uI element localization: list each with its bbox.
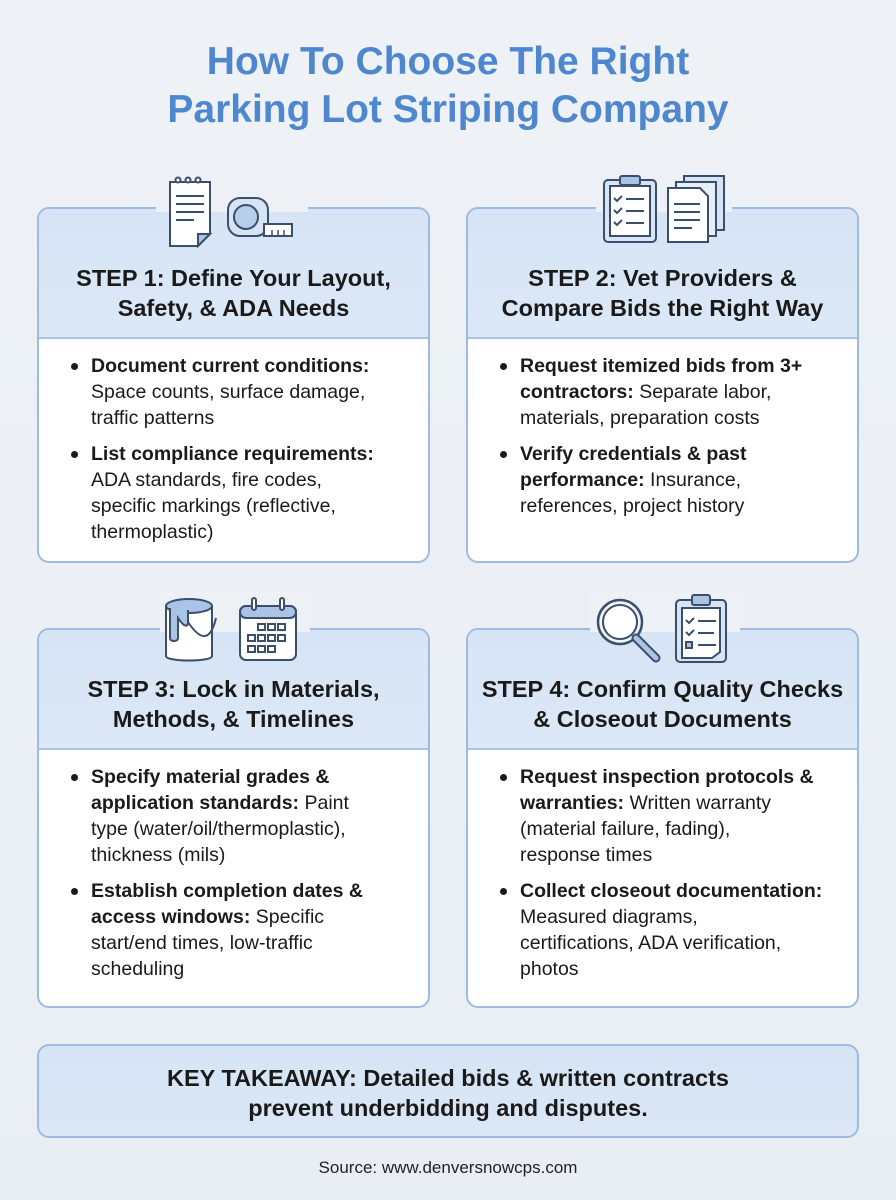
step 1 bullets [71, 355, 374, 543]
step 4 heading: & Closeout Documents [533, 706, 792, 732]
title [167, 40, 729, 131]
step 4 bullets [500, 766, 822, 980]
step 4 bullets: Measured diagrams, [520, 906, 698, 928]
callout: key takeaway [37, 1044, 859, 1138]
step 3 bullets: thickness (mils) [91, 844, 225, 866]
step 2 bullets: Verify credentials & past performance: Insurance, references, project history [520, 443, 747, 517]
callout: key takeaway: prevent underbidding and disputes. [248, 1095, 648, 1121]
step 4 bullets: response times [520, 844, 652, 866]
step 3 bullets: Specify material grades & [91, 766, 329, 788]
step 3 bullets: Establish completion dates & [91, 880, 363, 902]
panel: step 1 [37, 207, 430, 563]
step 4 bullets: Request inspection protocols & [520, 766, 814, 788]
step 2 heading [468, 209, 857, 339]
step 4 heading [468, 630, 857, 750]
title: Parking Lot Striping Company [167, 88, 729, 131]
panel: step 4 [466, 628, 859, 1008]
step 3 heading: Methods, & Timelines [113, 706, 354, 732]
step 3 bullets [71, 766, 363, 980]
step 2 bullets [500, 355, 802, 517]
step 1 bullets: Document current conditions: Space counts, surface damage, traffic patterns [91, 355, 369, 429]
step 3 bullets: start/end times, low-traffic [91, 932, 313, 954]
step 4 bullets: Collect closeout documentation: [520, 880, 822, 902]
panel: step 3 [37, 628, 430, 1008]
icons: paint bucket and calendar [160, 597, 310, 662]
step 2 heading: Compare Bids the Right Way [502, 295, 823, 321]
step 3 bullets: type (water/oil/thermoplastic), [91, 818, 346, 840]
step 3 heading [39, 630, 428, 750]
step 2 heading: STEP 2: Vet Providers & [528, 265, 797, 291]
step 4 heading: STEP 4: Confirm Quality Checks [482, 676, 843, 702]
icons: magnifier and checklist [590, 594, 740, 663]
step 4 bullets: warranties: Written warranty [520, 792, 771, 814]
step 3 bullets: application standards: Paint [91, 792, 349, 814]
step 1 heading [39, 209, 428, 339]
step 2 bullets: Request itemized bids from 3+ contractors: Separate labor, materials, preparation costs [520, 355, 802, 429]
callout: key takeaway: KEY TAKEAWAY: Detailed bids & written contracts [167, 1065, 729, 1091]
step 1 heading: STEP 1: Define Your Layout, [76, 265, 391, 291]
icons: notepad and tape measure [156, 176, 308, 248]
step 4 bullets: photos [520, 958, 579, 980]
title: How To Choose The Right [207, 40, 689, 83]
step 3 bullets: scheduling [91, 958, 184, 980]
icons: clipboard and documents [596, 175, 732, 243]
step 1 heading: Safety, & ADA Needs [118, 295, 349, 321]
step 3 bullets: access windows: Specific [91, 906, 324, 928]
source footer: Source: www.denversnowcps.com [319, 1158, 577, 1177]
panel: step 2 [466, 207, 859, 563]
step 4 bullets: certifications, ADA verification, [520, 932, 781, 954]
step 1 bullets: List compliance requirements: ADA standards, fire codes, specific markings (reflective, thermoplastic) [91, 443, 374, 543]
step 4 bullets: (material failure, fading), [520, 818, 730, 840]
step 3 heading: STEP 3: Lock in Materials, [87, 676, 380, 702]
